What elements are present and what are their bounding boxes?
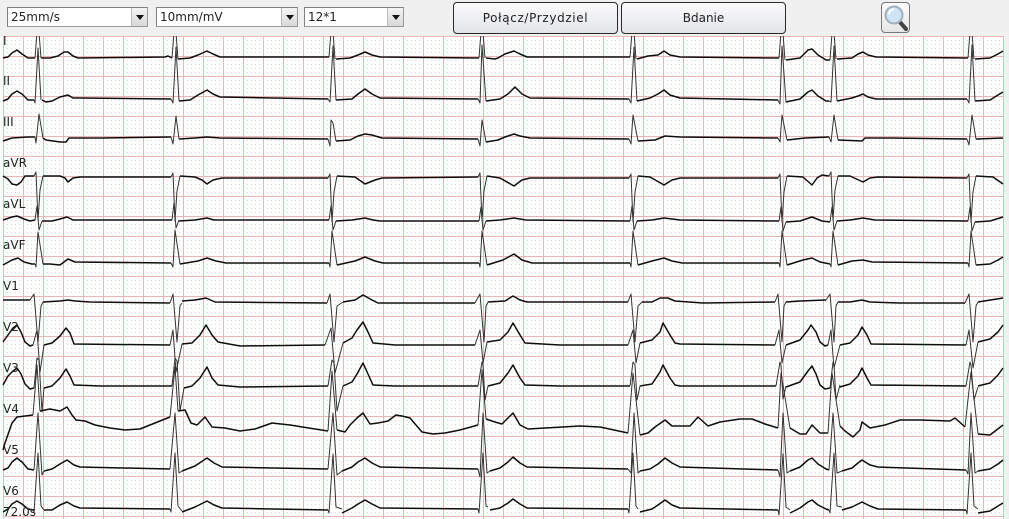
button: examination: Bdanie <box>683 11 724 25</box>
dropdown: gain <box>156 7 298 27</box>
lead III trace <box>3 114 1003 146</box>
lead V1 trace <box>3 294 1003 342</box>
lead I trace <box>2 36 1004 61</box>
icon: magnifier button <box>881 2 910 33</box>
dropdown: layout: 12*1 <box>308 10 337 24</box>
label: lead V6: V6 <box>3 484 19 498</box>
label: lead V4: V4 <box>3 402 19 416</box>
lead V5 trace <box>3 413 1003 477</box>
lead II trace <box>3 45 1003 104</box>
label: lead II: II <box>3 74 10 88</box>
lead aVF trace <box>3 230 1003 267</box>
label: lead aVL: aVL <box>3 197 26 211</box>
dropdown: paper speed: 25mm/s <box>11 10 60 24</box>
label: lead V5: V5 <box>3 443 19 457</box>
button: examination <box>621 2 786 34</box>
lead aVR trace <box>3 172 1003 222</box>
label: lead aVF: aVF <box>3 238 26 252</box>
label: elapsed time: 72.0s <box>3 505 36 519</box>
lead aVL trace <box>3 203 1003 231</box>
button: connect/assign <box>453 2 618 34</box>
lead V3 trace <box>3 358 1003 412</box>
label: lead I: I <box>3 34 7 48</box>
dropdown: layout <box>304 7 404 27</box>
button: connect/assign: Połącz/Przydziel <box>483 11 588 25</box>
dropdown: paper speed <box>7 7 148 27</box>
label: lead V2: V2 <box>3 320 19 334</box>
lead V6 trace <box>3 453 1003 515</box>
lead V2 trace <box>3 322 1003 373</box>
label: lead III: III <box>3 115 14 129</box>
label: lead V1: V1 <box>3 279 19 293</box>
lead V4 trace <box>3 365 1003 450</box>
label: lead V3: V3 <box>3 361 19 375</box>
dropdown: gain: 10mm/mV <box>160 10 223 24</box>
label: lead aVR: aVR <box>3 156 27 170</box>
